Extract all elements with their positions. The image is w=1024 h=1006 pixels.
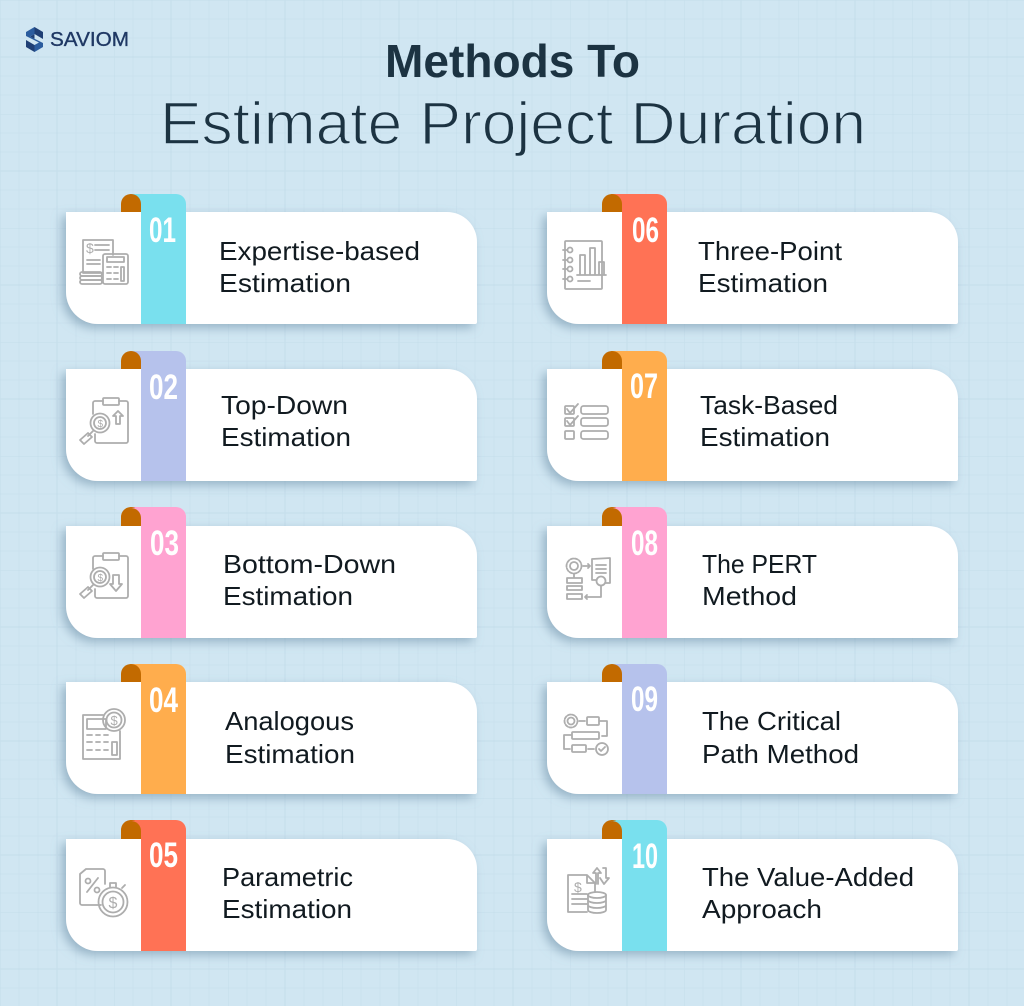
panel: 02 Top-Down Estimation — [66, 351, 477, 481]
label: Task-Based — [700, 390, 838, 420]
label: Top-Down — [221, 390, 348, 420]
panel: 09 The Critical Path Method: 09 — [631, 680, 658, 719]
label — [219, 236, 420, 298]
icon: calculator with coin — [83, 709, 125, 759]
label: Approach — [702, 894, 822, 924]
label — [222, 862, 353, 924]
label — [702, 706, 859, 769]
label: Estimation — [222, 894, 352, 924]
icon: report with bar chart — [563, 241, 606, 289]
panel: 07 Task-Based Estimation: 07 — [630, 367, 658, 406]
label — [223, 549, 396, 611]
label: Analogous — [225, 706, 354, 736]
icon: percent document and stopwatch: $ — [108, 895, 118, 912]
panel: 01 Expertise-based Estimation — [66, 194, 477, 324]
icon: critical path flow — [564, 714, 608, 755]
icon: checklist — [565, 404, 608, 439]
panel: 03 Bottom-Down Estimation: 03 — [150, 524, 179, 563]
panel: 05 Parametric Estimation — [66, 820, 477, 951]
label: The Critical — [702, 706, 841, 736]
label — [702, 549, 817, 611]
panel: 03 Bottom-Down Estimation — [66, 507, 477, 638]
label: Expertise-based — [219, 236, 420, 266]
label: The Value-Added — [702, 862, 914, 892]
label: Estimation — [700, 422, 830, 452]
label: Parametric — [222, 862, 353, 892]
title: Methods To — [385, 35, 640, 87]
label: Estimation — [698, 268, 828, 298]
label: The PERT — [702, 549, 817, 579]
panel: 06 Three-Point Estimation — [547, 194, 958, 324]
panel: 08 The PERT Method — [547, 507, 958, 638]
panel: 05 Parametric Estimation: 05 — [149, 836, 178, 875]
panel: 01 Expertise-based Estimation: 01 — [149, 211, 176, 250]
label: Estimation — [221, 422, 351, 452]
panel: 04 Analogous Estimation: 04 — [149, 681, 178, 720]
panel: 06 Three-Point Estimation: 06 — [632, 211, 659, 250]
label — [700, 390, 838, 452]
label — [698, 236, 843, 298]
panel: 04 Analogous Estimation — [66, 664, 477, 794]
label: Method — [702, 581, 797, 611]
label — [702, 862, 914, 924]
label — [225, 706, 355, 769]
icon: document with database and arrows: $ — [574, 879, 582, 895]
icon: invoice and calculator — [80, 240, 128, 284]
label: Estimation — [223, 581, 353, 611]
panel: 10 The Value-Added Approach — [547, 820, 958, 951]
panel: 08 The PERT Method: 08 — [631, 524, 658, 563]
title: Estimate Project Duration — [160, 90, 866, 157]
logo: Saviom — [26, 27, 129, 52]
panel: 07 Task-Based Estimation — [547, 351, 958, 481]
label: Estimation — [225, 739, 355, 769]
icon: clipboard with down arrow: $ — [98, 573, 104, 584]
icon: invoice and calculator: $ — [86, 240, 94, 256]
icon: clipboard with down arrow — [80, 553, 128, 598]
label: Three-Point — [698, 236, 843, 266]
icon: calculator with coin: $ — [110, 713, 118, 728]
icon: document with database and arrows — [568, 868, 609, 913]
label: Path Method — [702, 739, 859, 769]
icon: clipboard with up arrow: $ — [98, 419, 104, 430]
label: Bottom-Down — [223, 549, 396, 579]
icon: gear, certificate and flow — [566, 558, 610, 599]
panel: 09 The Critical Path Method — [547, 664, 958, 794]
icon: percent document and stopwatch — [80, 869, 128, 916]
label: Estimation — [219, 268, 351, 298]
logo: Saviom: SAVIOM — [50, 29, 129, 51]
panel: 10 The Value-Added Approach: 10 — [632, 837, 658, 876]
icon: clipboard with up arrow — [80, 398, 128, 444]
label — [221, 390, 351, 452]
panel: 02 Top-Down Estimation: 02 — [149, 368, 178, 407]
title — [160, 35, 866, 157]
